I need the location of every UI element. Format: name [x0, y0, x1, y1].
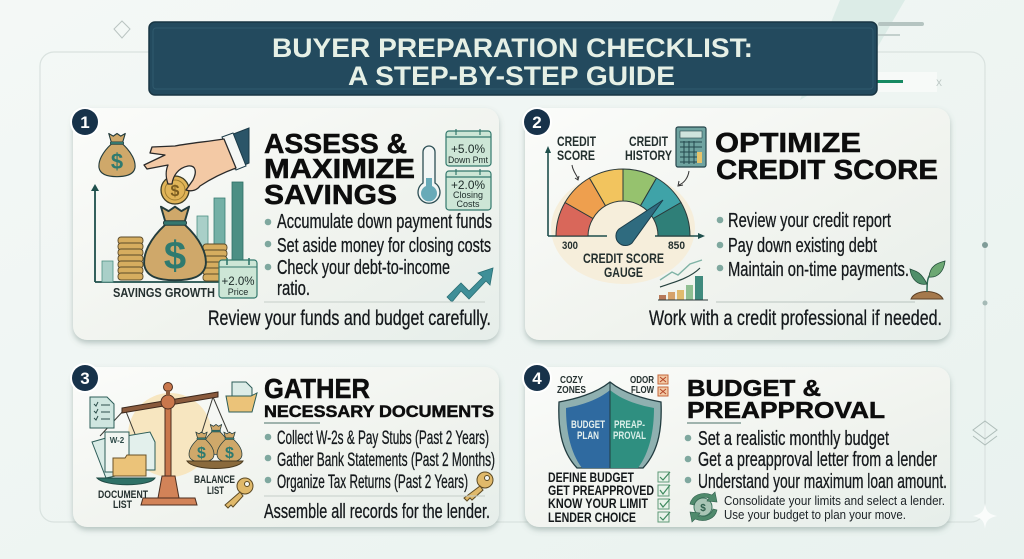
badge 4: [522, 363, 552, 393]
calendar: price: [219, 258, 257, 298]
labels: odor flow: [630, 374, 668, 396]
icon: folder: [226, 382, 257, 412]
documents: [92, 432, 155, 485]
arrow: upward trend: [447, 268, 493, 302]
panel: step 2 optimize credit score: [522, 107, 950, 340]
icon: large money bag: [144, 207, 206, 280]
badge 1: 1: [80, 113, 90, 132]
calendar: down payment: +5.0%: [451, 142, 485, 156]
checklist: GET PREAPPROVED: [548, 483, 654, 498]
bullet list: [685, 428, 947, 493]
chart label: SAVINGS GROWTH: [113, 285, 215, 300]
calendar: price: +2.0%: [222, 274, 255, 288]
calendar: closing costs: +2.0%: [451, 178, 485, 192]
money bags: $: [225, 445, 234, 462]
bullet list: Organize Tax Returns (Past 2 Years): [277, 472, 468, 493]
title text: BUYER PREPARATION CHECKLIST:: [272, 33, 753, 63]
chart: credit score gauge: CREDIT SCORE: [583, 250, 664, 266]
labels: balance list and document list: DOCUMENT: [98, 489, 148, 501]
chart: savings growth: [91, 182, 243, 300]
closing note: [724, 493, 945, 522]
labels: cozy zones: ZONES: [557, 384, 586, 396]
icon: cycle arrows: $: [700, 503, 706, 514]
bullet list: Set aside money for closing costs: [277, 235, 491, 257]
calendar: down payment: Down Pmt: [448, 155, 488, 165]
chart: credit score gauge: 300: [562, 240, 578, 252]
heading: optimize credit score: OPTIMIZE: [715, 127, 861, 158]
panel: step 3 gather necessary documents: [70, 363, 499, 527]
labels: odor flow: FLOW: [631, 384, 654, 396]
heading: optimize credit score: CREDIT SCORE: [716, 154, 938, 185]
footer note: Review your funds and budget carefully.: [208, 307, 491, 330]
closing note: Use your budget to plan your move.: [724, 507, 906, 522]
labels: cozy zones: COZY: [560, 374, 583, 386]
icon: key: [225, 478, 253, 508]
checklist: DEFINE BUDGET: [548, 470, 635, 485]
heading: gather necessary documents: NECESSARY DOCUMENTS: [264, 403, 494, 421]
label: credit history: [625, 133, 689, 186]
heading: assess and maximize savings: SAVINGS: [264, 179, 397, 210]
heading: gather necessary documents: GATHER: [264, 373, 370, 404]
heading: budget and preapproval: [687, 375, 885, 423]
panel: step 1 assess and maximize savings: [70, 107, 499, 340]
documents: W-2: [110, 436, 125, 445]
icon: shield: [559, 382, 661, 468]
heading: budget and preapproval: BUDGET &: [687, 375, 821, 401]
bullet list: Gather Bank Statements (Past 2 Months): [277, 450, 495, 471]
heading: gather necessary documents: [264, 373, 494, 421]
money bags: $: [197, 445, 206, 462]
panel: step 4 budget and preapproval: [522, 363, 950, 527]
bullet list: Maintain on-time payments.: [728, 259, 909, 281]
label: credit score: SCORE: [557, 147, 595, 163]
calendar: closing costs: Costs: [456, 199, 480, 209]
labels: odor flow: ODOR: [630, 374, 654, 386]
icon: large money bag: $: [164, 234, 186, 278]
chart: credit score gauge: GAUGE: [604, 264, 643, 280]
label: credit score: CREDIT: [557, 133, 596, 149]
text: X: [936, 78, 942, 88]
label: credit history: HISTORY: [625, 147, 672, 163]
money bags: [187, 424, 243, 468]
subtitle text: A STEP-BY-STEP GUIDE: [348, 61, 675, 91]
badge 2: 2: [532, 113, 542, 132]
label: credit score: [557, 133, 596, 180]
checklist: KNOW YOUR LIMIT: [548, 496, 649, 511]
icon: cycle arrows: [690, 492, 717, 522]
badge 4: 4: [532, 369, 542, 388]
icon: thermometer: [418, 146, 440, 203]
bullet list: Check your debt-to-income: [277, 257, 450, 279]
footer note: Assemble all records for the lender.: [264, 501, 490, 523]
icon: small money bag: $: [111, 149, 123, 174]
icon: shield: PLAN: [577, 430, 599, 442]
heading: optimize credit score: [715, 127, 938, 185]
labels: balance list and document list: [98, 474, 235, 511]
calendar: down payment: [446, 129, 491, 166]
illustration: balance scale: [92, 382, 243, 505]
footer note: Work with a credit professional if needed.: [649, 307, 942, 330]
chart: credit score gauge: 850: [668, 240, 685, 252]
badge 2: [522, 107, 552, 137]
icon: gold key: [464, 472, 493, 501]
bullet list: Set a realistic monthly budget: [698, 428, 889, 450]
icon: shield: PROVAL: [613, 430, 646, 442]
icon: hand dropping coin: $: [171, 183, 180, 200]
chart: credit score gauge: [545, 146, 705, 280]
icon: calculator: [676, 127, 706, 167]
icon: seedling: [910, 261, 945, 299]
heading: budget and preapproval: PREAPPROVAL: [687, 397, 885, 423]
bullet list: Accumulate down payment funds: [277, 211, 492, 233]
shield text: BUDGET: [571, 419, 605, 431]
icon: small money bag: [99, 134, 135, 177]
bullet list: ratio.: [277, 278, 310, 300]
icon: shield: PREAP-: [614, 419, 645, 431]
closing note: Consolidate your limits and select a lender.: [724, 493, 945, 508]
gauge needle: [616, 200, 663, 246]
chart: mini growth bars: [658, 260, 708, 300]
heading: assess and maximize savings: MAXIMIZE: [264, 153, 415, 184]
labels: balance list and document list: LIST: [113, 499, 132, 511]
bullet list: [265, 428, 495, 493]
badge 1: [70, 107, 100, 137]
checklist: LENDER CHOICE: [548, 510, 636, 525]
calendar: closing costs: Closing: [453, 190, 483, 200]
checklist: [548, 470, 670, 525]
heading: assess and maximize savings: [264, 128, 415, 210]
icon: hand dropping coin: [144, 128, 249, 204]
heading: assess and maximize savings: ASSESS &: [264, 128, 407, 159]
calendar: closing costs: [446, 169, 491, 210]
bullet list: Review your credit report: [728, 210, 891, 232]
labels: balance list and document list: LIST: [207, 485, 224, 497]
calendar: price: Price: [228, 287, 248, 297]
bullet list: [717, 210, 909, 281]
labels: cozy zones: [557, 374, 586, 396]
title banner: [149, 22, 877, 95]
bullet list: [265, 211, 492, 300]
label: credit history: CREDIT: [629, 133, 668, 149]
badge 3: 3: [80, 369, 90, 388]
bullet list: Get a preapproval letter from a lender: [698, 449, 937, 471]
bullet list: Collect W-2s & Pay Stubs (Past 2 Years): [277, 428, 489, 449]
bullet list: Pay down existing debt: [728, 235, 877, 257]
badge 3: [70, 363, 100, 393]
icon: checklist: [90, 397, 114, 428]
labels: balance list and document list: BALANCE: [194, 474, 235, 486]
